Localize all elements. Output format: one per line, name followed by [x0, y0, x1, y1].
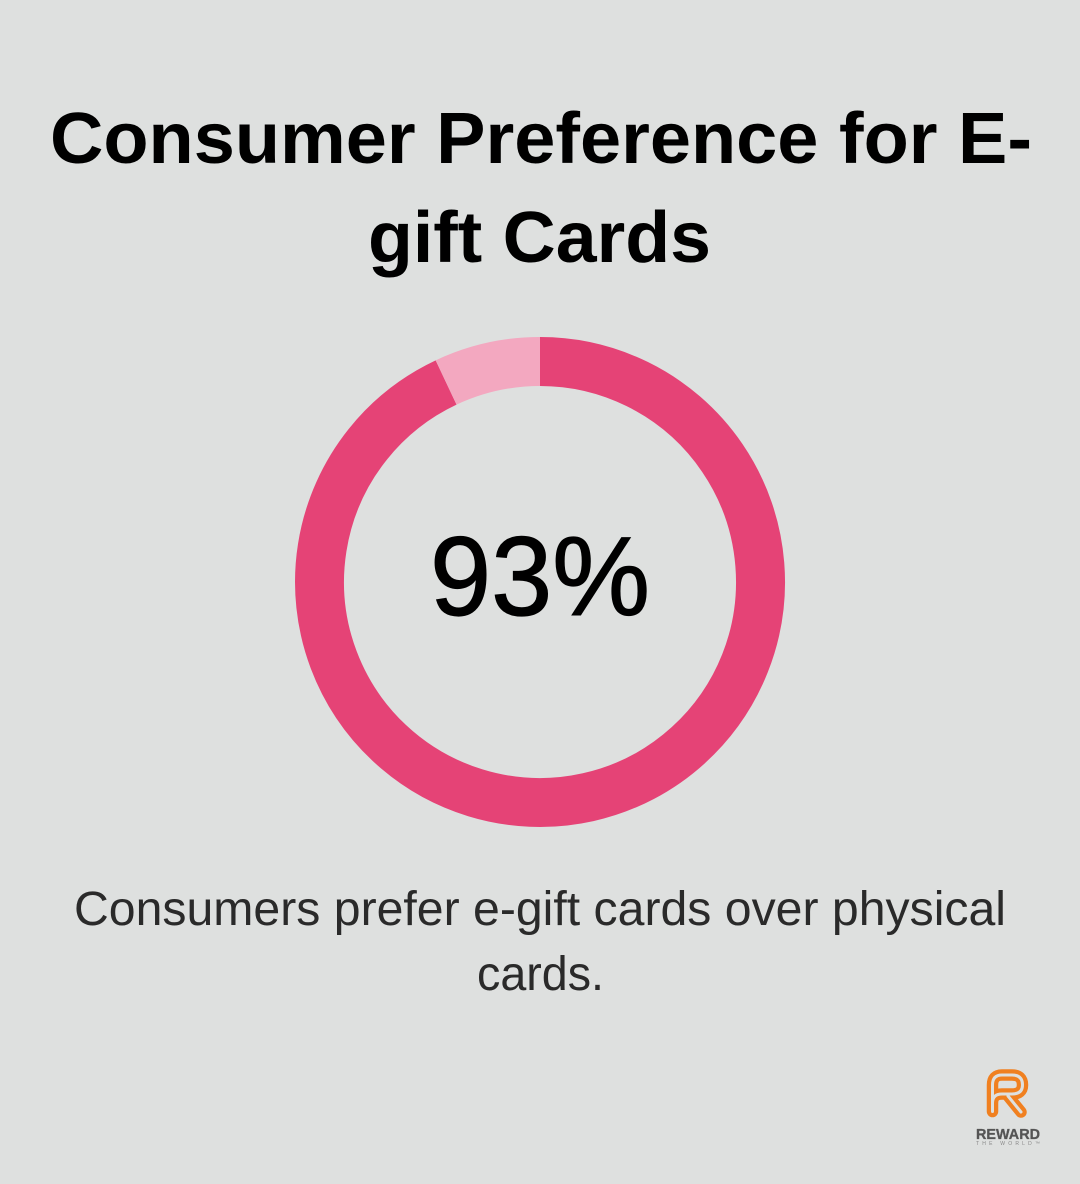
remainder segment: 7%	[446, 362, 540, 382]
icon: R mark	[992, 1075, 1022, 1112]
logo: Reward the World	[976, 1075, 1040, 1147]
donut chart: 93%	[320, 362, 761, 803]
center value: 93%	[430, 514, 650, 639]
logo tagline: THE WORLD™	[976, 1141, 1040, 1147]
description: Consumers prefer e-gift cards over physical	[74, 883, 1006, 936]
description	[74, 883, 1006, 1001]
title: gift Cards	[368, 198, 711, 278]
title: Consumer Preference for E-	[50, 99, 1032, 179]
title	[50, 99, 1032, 278]
logo wordmark: REWARD	[976, 1126, 1040, 1143]
main segment: 93%	[320, 362, 761, 803]
description: cards.	[477, 948, 604, 1001]
